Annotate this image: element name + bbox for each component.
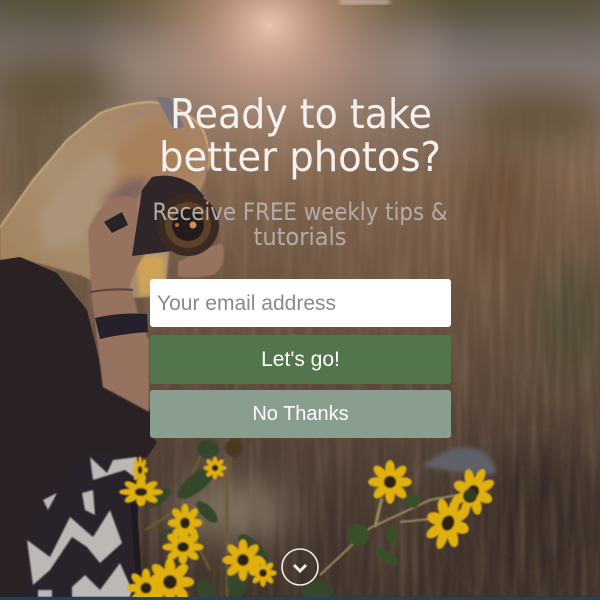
- bracelet: [95, 314, 148, 339]
- ring: [104, 212, 128, 233]
- sunflowers left group: [119, 439, 334, 600]
- sun glare: [0, 0, 600, 300]
- heading: Ready to take: [170, 90, 432, 138]
- sunflowers right group: [320, 460, 502, 575]
- submit button: [150, 335, 451, 384]
- arm and hand: [88, 196, 149, 412]
- bottom bar: [0, 597, 600, 600]
- subheading: tutorials: [254, 223, 346, 251]
- chevron dress: [25, 452, 140, 597]
- camera: [132, 176, 219, 256]
- black top: [0, 257, 157, 597]
- far hand: [178, 243, 224, 278]
- email input: [150, 279, 451, 327]
- subheading: Receive FREE weekly tips &: [152, 198, 448, 226]
- woman with camera: [0, 97, 224, 597]
- hair: [0, 102, 209, 298]
- grass texture: [7, 188, 600, 597]
- email input: Your email address: [157, 292, 336, 315]
- no thanks button: [150, 390, 451, 438]
- submit button: Let's go!: [261, 348, 340, 371]
- scroll down icon: [281, 548, 319, 586]
- grey rock: [422, 447, 497, 475]
- no thanks button: No Thanks: [252, 403, 349, 425]
- sunglasses on head: [156, 97, 184, 130]
- heading: better photos?: [159, 133, 441, 181]
